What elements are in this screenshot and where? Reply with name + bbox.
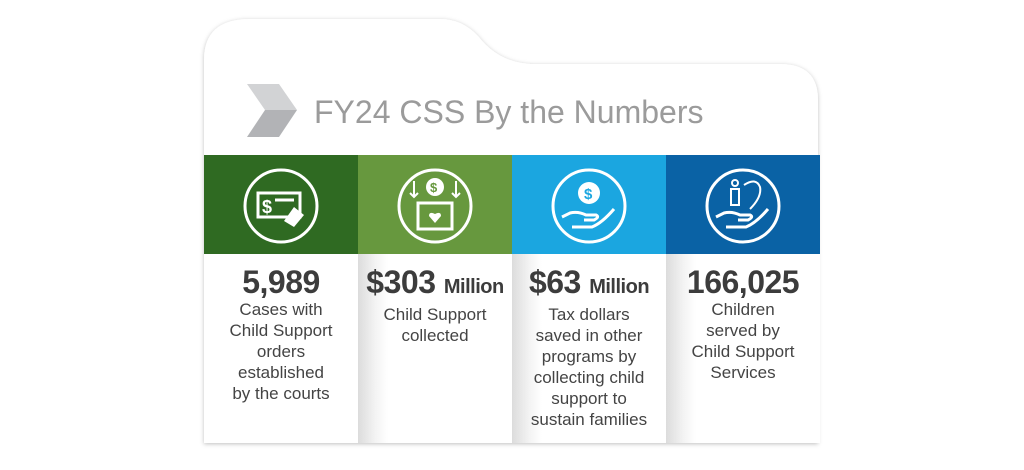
icon: check signing — [244, 168, 318, 244]
panel: tax dollars: Tax dollars — [548, 305, 630, 324]
panel: children: 166,025 — [687, 264, 799, 300]
panel: collected — [358, 155, 512, 443]
panel: cases: established — [238, 363, 324, 382]
icon: donation box — [398, 168, 472, 244]
panel: cases: 5,989 — [242, 264, 320, 300]
panel: children: Services — [710, 363, 776, 382]
panel: tax dollars: $63 Million — [529, 264, 649, 300]
panel: children: served by — [706, 321, 780, 340]
panel: children: Child Support — [691, 342, 794, 361]
panel: cases: Child Support — [229, 321, 332, 340]
panel: collected: collected — [401, 326, 469, 345]
title: FY24 CSS By the Numbers — [314, 94, 703, 130]
title — [247, 84, 703, 137]
icon: donation box: $ — [430, 180, 438, 195]
panel: cases — [204, 155, 358, 403]
panel: tax dollars: sustain families — [531, 410, 647, 429]
panel: tax dollars: support to — [551, 389, 627, 408]
icon: hand with coin — [552, 168, 626, 244]
icon: chevron — [247, 84, 297, 137]
icon: child with heart — [706, 168, 780, 244]
panel: collected: Child Support — [383, 305, 486, 324]
panel: tax dollars: programs by — [542, 347, 636, 366]
panel: children: Children — [711, 300, 775, 319]
icon: check signing: $ — [262, 197, 272, 217]
panel: cases: by the courts — [232, 384, 330, 403]
panel: tax dollars — [512, 155, 666, 443]
icon: hand with coin: $ — [584, 186, 593, 203]
panel: children — [666, 155, 820, 443]
panel: tax dollars: collecting child — [534, 368, 644, 387]
panel: tax dollars: saved in other — [536, 326, 642, 345]
panel: collected: $303 Million — [366, 264, 504, 300]
panel: cases: Cases with — [239, 300, 323, 319]
panel: cases: orders — [257, 342, 305, 361]
